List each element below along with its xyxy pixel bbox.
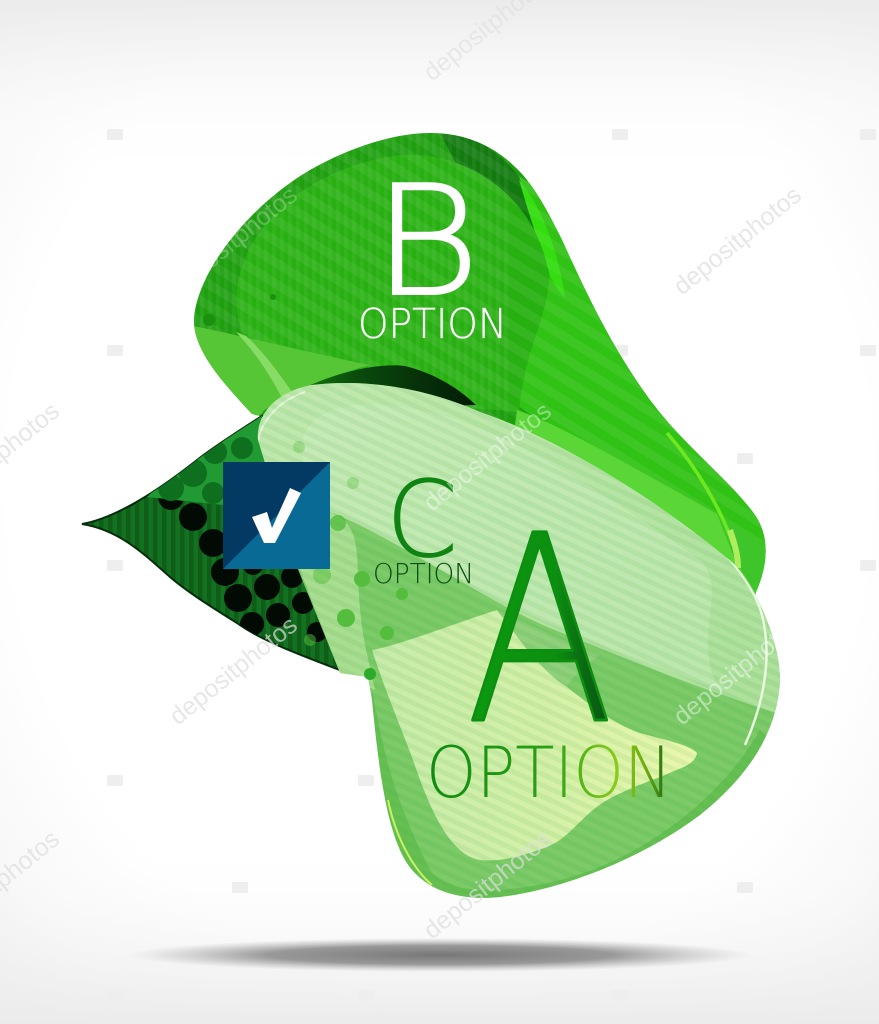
check badge bbox=[223, 462, 330, 569]
watermarks: depositphotos bbox=[164, 611, 303, 731]
halftone green dots bbox=[293, 441, 408, 680]
inner lobe bbox=[236, 155, 548, 412]
watermarks: depositphotos bbox=[668, 611, 807, 731]
watermark camera marks bbox=[107, 129, 876, 1001]
watermarks: depositphotos bbox=[668, 181, 807, 301]
dark upper-right wedge bbox=[440, 133, 548, 284]
watermarks: depositphotos bbox=[164, 181, 303, 301]
yellow-pale blob bbox=[372, 610, 697, 860]
left lighter band bbox=[300, 512, 375, 690]
edge highlight bbox=[726, 557, 768, 746]
watermarks: depositphotos bbox=[418, 397, 557, 517]
letter C: C bbox=[386, 459, 458, 581]
watermarks: depositphotos bbox=[418, 825, 557, 945]
pale upper area bbox=[250, 380, 800, 720]
letter B: B bbox=[373, 153, 480, 330]
lower rim bbox=[370, 690, 790, 900]
right bright zone bbox=[519, 176, 766, 579]
letter A: A bbox=[466, 481, 614, 781]
shape: A option panel bbox=[250, 380, 800, 910]
label: A option: OPTION bbox=[426, 732, 672, 814]
label: C option: OPTION bbox=[373, 557, 474, 590]
icon: check mark bbox=[252, 488, 301, 543]
band along A edge bbox=[515, 410, 768, 610]
shape: B option panel bbox=[194, 133, 766, 595]
label: B option: OPTION bbox=[358, 300, 507, 348]
floor shadow bbox=[128, 938, 752, 972]
shape: leaf with check, dark halftone bbox=[82, 414, 340, 671]
dark crescent behind A bbox=[262, 365, 476, 412]
bright curve bbox=[667, 433, 733, 545]
lower-left light wedge bbox=[190, 326, 370, 416]
